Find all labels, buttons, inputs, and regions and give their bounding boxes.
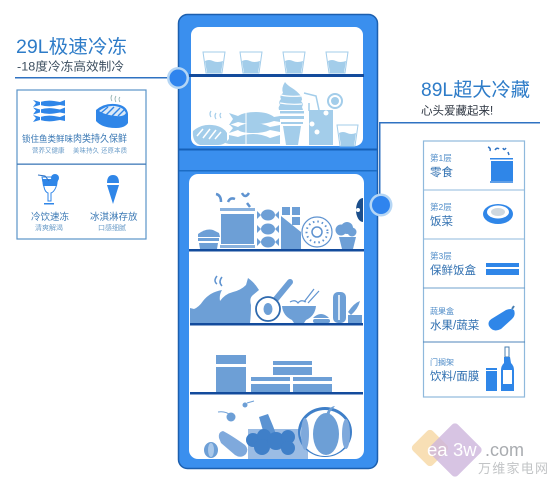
icon: steak with steam xyxy=(193,111,227,145)
right callout line and marker xyxy=(370,122,540,216)
icon: donut xyxy=(302,217,332,247)
feature note: fish: 营养又健康 xyxy=(32,146,65,154)
icon: ice cream cone xyxy=(279,82,304,145)
refrigerator contents xyxy=(190,193,362,459)
icon: chips bag with macaroni xyxy=(216,193,255,248)
icon: hot dog xyxy=(333,292,346,323)
icon: dish xyxy=(483,204,513,224)
watermark logo xyxy=(410,422,548,478)
watermark logo: 3w xyxy=(453,439,477,460)
heading: 89L fridge: 89L超大冷藏 xyxy=(421,79,530,101)
icon: steak xyxy=(96,95,128,128)
icon: eggplant xyxy=(488,306,515,330)
feature note: meat: 美味持久 还原本质 xyxy=(73,146,127,154)
feature note: drinks: 清爽解渴 xyxy=(35,223,63,232)
panel: freezer features xyxy=(17,90,146,239)
feature note: ice cream: 口感细腻 xyxy=(98,223,126,232)
feature: drinks: 冷饮速冻 xyxy=(31,211,70,223)
icon: cocktail xyxy=(38,174,59,204)
watermark ea3w.com: ea xyxy=(427,439,448,460)
icon: pan with fish xyxy=(256,282,290,321)
heading: 29L freezer: 29L极速冷冻 xyxy=(16,36,127,58)
icon: food containers xyxy=(216,355,332,392)
icon: cupcake xyxy=(336,222,356,249)
icon: eggplant xyxy=(219,431,247,457)
fridge body xyxy=(178,14,378,468)
icon: chocolate bar xyxy=(281,207,301,249)
icon: three fish xyxy=(225,112,280,145)
icon: burger xyxy=(313,314,330,323)
left callout line and marker xyxy=(15,67,189,89)
watermark logo: .com xyxy=(485,440,524,460)
layer 3 name: 保鲜饭盒 xyxy=(430,263,476,277)
subheading: freezer: -18度冷冻高效制冷 xyxy=(17,58,124,74)
feature: fish: 锁住鱼类鲜味 xyxy=(22,133,73,144)
panel: fridge layers xyxy=(423,141,525,397)
icon: glass of water bottom right xyxy=(337,125,358,146)
icon: leafy side dish xyxy=(348,301,362,323)
icon: ice cream xyxy=(107,175,119,204)
layer 4 name: 水果/蔬菜 xyxy=(430,319,480,332)
feature: ice cream: 冰淇淋存放 xyxy=(90,211,138,223)
icon: fridge door handle xyxy=(356,198,363,222)
icon: fish xyxy=(33,100,65,122)
layer 1 name: 零食 xyxy=(430,165,453,179)
icon: lunch box xyxy=(486,263,519,275)
watermark chinese name: 万维家电网 xyxy=(478,461,548,476)
icon: cold drink with straw and lemon xyxy=(304,93,342,145)
icon: three candies xyxy=(257,210,279,248)
icon: pumpkin xyxy=(298,406,352,457)
icon: roast chicken xyxy=(190,276,259,323)
icon: can and bottle xyxy=(486,347,514,391)
layer 5 label: 门搁架 xyxy=(430,357,454,367)
icon: bell pepper xyxy=(204,442,218,458)
layer 3 label: 第3层 xyxy=(430,251,452,261)
icon: four glasses on the top shelf xyxy=(203,52,348,73)
feature: meat: 肉类持久保鲜 xyxy=(73,132,127,145)
layer 4 label: 蔬果盒 xyxy=(430,306,454,316)
subheading: fridge: 心头爱藏起来! xyxy=(421,104,493,118)
layer 2 name: 饭菜 xyxy=(430,214,453,228)
icon: snack bag xyxy=(488,147,513,183)
layer 5 name: 饮料/面膜 xyxy=(430,369,479,383)
icon: cake cup xyxy=(198,230,220,249)
freezer contents xyxy=(193,52,358,146)
icon: bowl with chopsticks xyxy=(282,289,319,323)
icon: broccoli xyxy=(246,414,308,459)
layer 2 label: 第2层 xyxy=(430,202,452,212)
icon: cherries xyxy=(218,401,254,422)
layer 1 label: 第1层 xyxy=(430,153,452,163)
